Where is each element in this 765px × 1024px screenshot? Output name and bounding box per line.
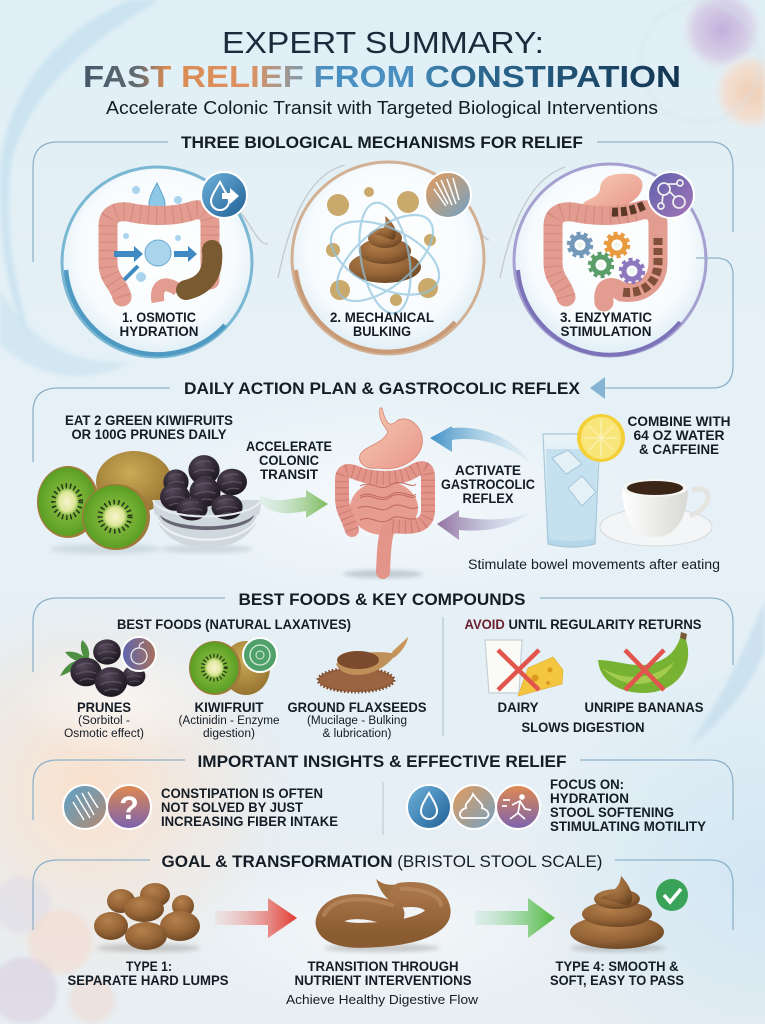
food: prunes	[60, 637, 156, 740]
enzyme gears	[568, 234, 644, 282]
title line 1: EXPERT SUMMARY:	[222, 25, 544, 60]
stool: transition sausage	[324, 879, 441, 952]
avoid: unripe bananas	[584, 632, 704, 715]
section frame	[33, 860, 733, 930]
hydration sphere and arrows	[114, 186, 197, 282]
label: 3. ENZYMATIC	[560, 310, 652, 325]
text: accelerate colonic transit	[246, 439, 332, 482]
label: type 1	[68, 958, 228, 988]
food: ground flaxseeds: & lubrication)	[322, 728, 392, 740]
kiwifruits	[37, 451, 172, 554]
text: accelerate colonic transit: ACCELERATE	[246, 439, 332, 454]
text: combine with water and caffeine: 64 OZ WATER	[634, 428, 725, 443]
mechanism 1: osmotic hydration	[62, 167, 252, 357]
icon: check mark	[656, 879, 688, 911]
section frame	[33, 142, 733, 262]
label: 1. OSMOTIC	[122, 310, 196, 325]
text: fiber insight: CONSTIPATION IS OFTEN	[161, 786, 323, 801]
food: ground flaxseeds: (Mucilage - Bulking	[307, 715, 407, 727]
food: kiwifruit: KIWIFRUIT	[194, 699, 264, 715]
panel: best foods and key compounds	[33, 590, 733, 740]
mechanism 2: mechanical bulking: BULKING	[353, 324, 411, 339]
subtitle: Accelerate Colonic Transit with Targeted Biological Interventions	[106, 98, 658, 118]
text: combine with water and caffeine: & CAFFEINE	[639, 442, 719, 457]
heading: THREE BIOLOGICAL MECHANISMS FOR RELIEF	[181, 133, 583, 152]
food: prunes: (Sorbitol -	[78, 715, 130, 727]
heading: IMPORTANT INSIGHTS & EFFECTIVE RELIEF	[198, 752, 566, 771]
section frame with arrow	[33, 258, 733, 462]
heading: DAILY ACTION PLAN & GASTROCOLIC REFLEX	[184, 379, 581, 398]
label: type 4: TYPE 4: SMOOTH &	[556, 958, 678, 974]
arrow: purple to intestines	[437, 510, 530, 540]
label: type 4	[550, 958, 684, 988]
label: transition	[294, 958, 472, 988]
mechanism 1: osmotic hydration: HYDRATION	[120, 324, 198, 339]
subheading: avoid: AVOID UNTIL REGULARITY RETURNS	[464, 617, 702, 632]
avoid: unripe bananas: UNRIPE BANANAS	[584, 699, 704, 715]
arrow: green	[475, 898, 555, 938]
caption: Stimulate bowel movements after eating	[468, 557, 720, 572]
icon: question mark	[107, 785, 151, 829]
panel: important insights	[33, 752, 733, 835]
icon: fiber question	[63, 785, 107, 829]
caption: Achieve Healthy Digestive Flow	[286, 993, 479, 1007]
text: activate gastrocolic reflex: ACTIVATE	[455, 463, 521, 478]
icon: stool softening	[452, 785, 496, 829]
food: kiwifruit: (Actinidin - Enzyme	[178, 715, 280, 727]
arrow	[590, 377, 605, 399]
section frame	[33, 598, 733, 672]
colon illustration	[553, 205, 658, 302]
text: eat kiwifruits or prunes	[65, 413, 233, 442]
heading: GOAL & TRANSFORMATION (BRISTOL STOOL SCALE)	[162, 852, 602, 871]
panel: daily action plan	[33, 258, 733, 578]
title block	[83, 25, 681, 118]
food: prunes: PRUNES	[77, 699, 131, 715]
section frame	[33, 760, 733, 820]
coffee cup on saucer	[600, 479, 712, 546]
icon: water drops	[149, 183, 165, 212]
food: ground flaxseeds	[288, 637, 426, 740]
label: type 4: SOFT, EASY TO PASS	[550, 972, 684, 988]
mechanism 3: enzymatic stimulation	[514, 164, 706, 356]
arrow: blue to stomach	[430, 426, 530, 462]
text: accelerate colonic transit: TRANSIT	[260, 467, 319, 482]
label: transition: TRANSITION THROUGH	[308, 958, 458, 974]
food: prunes: Osmotic effect)	[64, 728, 144, 740]
text: combine with water and caffeine: COMBINE WITH	[628, 414, 730, 429]
icon badge: molecules	[648, 172, 694, 218]
label: transition: NUTRIENT INTERVENTIONS	[294, 972, 472, 988]
subheading: best foods: BEST FOODS (NATURAL LAXATIVES)	[117, 617, 351, 632]
text: fiber insight	[161, 786, 338, 829]
text: accelerate colonic transit: COLONIC	[259, 453, 319, 468]
text: combine with water and caffeine	[628, 414, 730, 457]
label: type 1: SEPARATE HARD LUMPS	[68, 972, 228, 988]
connector curves	[240, 165, 565, 278]
stool: type 4 smooth	[570, 876, 666, 952]
icon badge: water arrow	[201, 172, 247, 218]
arrow: red	[215, 898, 297, 938]
text: activate gastrocolic reflex	[441, 463, 535, 506]
food: kiwifruit: digestion)	[203, 728, 255, 740]
food: kiwifruit	[178, 638, 280, 740]
icon badge: kiwi	[243, 638, 277, 672]
stool: type 1 lumps	[94, 883, 200, 952]
title line 2: FAST RELIEF FROM CONSTIPATION	[83, 59, 681, 94]
icon: motility runner	[496, 785, 540, 829]
icon: hydration	[407, 785, 451, 829]
icon badge: plum	[122, 637, 156, 671]
glass of water with lemon	[543, 414, 625, 547]
fiber web and stool	[320, 187, 450, 317]
icon badge: fibers	[425, 172, 471, 218]
text: fiber insight: NOT SOLVED BY JUST	[161, 800, 304, 815]
divider	[382, 782, 384, 835]
arrow: green to intestines	[260, 490, 328, 518]
text: slows digestion: SLOWS DIGESTION	[522, 719, 644, 735]
text: focus on: FOCUS ON:	[550, 777, 624, 792]
text: focus on: HYDRATION	[550, 791, 629, 806]
colon illustration	[108, 210, 212, 302]
icon: question mark: ?	[119, 790, 139, 826]
text: fiber insight: INCREASING FIBER INTAKE	[161, 814, 338, 829]
panel: goal and transformation	[33, 852, 733, 1007]
panel: three biological mechanisms	[33, 133, 733, 357]
text: activate gastrocolic reflex: GASTROCOLIC	[441, 477, 535, 492]
text: activate gastrocolic reflex: REFLEX	[462, 491, 514, 506]
text: eat kiwifruits or prunes: EAT 2 GREEN KIWIFRUITS	[65, 413, 233, 428]
text: focus on	[550, 777, 706, 834]
text: eat kiwifruits or prunes: OR 100G PRUNES DAILY	[72, 427, 226, 442]
label: 2. MECHANICAL	[330, 310, 434, 325]
mechanism 3: enzymatic stimulation: STIMULATION	[560, 324, 652, 339]
avoid: dairy	[485, 640, 563, 715]
food: ground flaxseeds: GROUND FLAXSEEDS	[288, 699, 426, 715]
digestive system illustration	[342, 408, 428, 578]
heading: BEST FOODS & KEY COMPOUNDS	[238, 590, 526, 609]
stomach	[582, 174, 643, 211]
label: type 1: TYPE 1:	[126, 958, 172, 974]
text: focus on: STOOL SOFTENING	[550, 805, 674, 820]
avoid: dairy: DAIRY	[498, 699, 539, 715]
divider	[442, 617, 444, 736]
bowl of prunes	[153, 455, 261, 553]
text: focus on: STIMULATING MOTILITY	[550, 819, 706, 834]
mechanism 2: mechanical bulking	[292, 162, 484, 354]
